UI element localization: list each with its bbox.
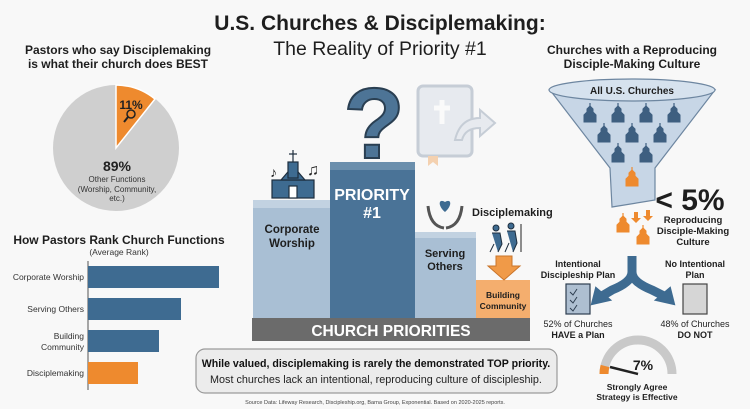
title xyxy=(214,12,546,60)
block: priority 1: PRIORITY xyxy=(334,187,410,204)
plan: no plan: DO NOT xyxy=(678,330,713,340)
plan: intentional: HAVE a Plan xyxy=(551,330,605,340)
funnel shape: All U.S. Churches xyxy=(590,86,674,97)
icon: church with notes: ♫ xyxy=(307,162,319,179)
gauge: 7 percent: Strategy is Effective xyxy=(596,392,678,402)
block: building community: Community xyxy=(480,301,527,311)
panel: bar chart rank: (Average Rank) xyxy=(89,247,149,257)
panel: funnel: Disciple-Making Culture xyxy=(564,57,701,71)
panel: podium xyxy=(252,68,553,341)
plan: intentional: Intentional xyxy=(555,259,601,269)
panel: funnel xyxy=(541,43,730,402)
arrow: split xyxy=(592,256,674,304)
pie chart: Other Functions xyxy=(89,175,145,184)
title: U.S. Churches & Disciplemaking: xyxy=(214,12,546,35)
plan: intentional xyxy=(541,259,615,340)
stat: less than 5 percent: Reproducing xyxy=(664,215,722,226)
gauge: 7 percent: 7% xyxy=(633,357,654,373)
pie chart: etc.) xyxy=(109,194,125,203)
callout: summary: Most churches lack an intentional, reproducing culture of discipleship. xyxy=(210,374,542,386)
title: The Reality of Priority #1 xyxy=(273,38,487,60)
panel: bar chart rank: Building xyxy=(54,331,84,341)
icon: church with notes xyxy=(270,150,319,198)
plan: no plan: No Intentional xyxy=(665,259,725,269)
heading: pastors say: is what their church does BEST xyxy=(28,57,209,71)
heading: pastors say: Pastors who say Disciplemaking xyxy=(25,43,211,57)
panel: bar chart rank: Serving Others xyxy=(27,304,84,314)
plan: intentional: Discipleship Plan xyxy=(541,270,615,280)
panel: pie chart best xyxy=(25,43,211,211)
panel: bar chart rank: Community xyxy=(41,342,85,352)
pie chart xyxy=(53,85,179,211)
plan: no plan: 48% of Churches xyxy=(660,319,730,329)
heading: pastors say xyxy=(25,43,211,71)
block: building community xyxy=(476,280,530,318)
icon: church with notes: ♪ xyxy=(270,164,277,180)
block: corporate worship xyxy=(253,200,331,318)
callout: summary xyxy=(196,349,557,393)
block: priority 1 xyxy=(330,162,415,318)
stat: less than 5 percent xyxy=(655,184,729,248)
block: serving others: Others xyxy=(427,261,463,273)
icon: falling churches xyxy=(617,210,653,244)
panel: bar chart rank: How Pastors Rank Church Functions xyxy=(13,233,225,247)
arrow: down orange xyxy=(488,256,520,280)
block: serving others xyxy=(415,232,476,318)
pie chart: 89% xyxy=(103,158,132,174)
block: corporate worship: Corporate xyxy=(265,224,319,236)
panel: funnel: Churches with a Reproducing xyxy=(547,43,717,57)
pie chart: (Worship, Community, xyxy=(78,185,156,194)
icon: bible xyxy=(418,86,495,166)
plan: intentional: 52% of Churches xyxy=(543,319,613,329)
plan: no plan xyxy=(660,259,730,340)
panel: bar chart rank: Corporate Worship xyxy=(13,272,84,282)
base: church priorities xyxy=(252,318,530,341)
pie chart: 11% xyxy=(119,98,143,112)
panel: bar chart rank xyxy=(13,233,225,390)
base: church priorities: CHURCH PRIORITIES xyxy=(311,323,471,340)
gauge: 7 percent xyxy=(596,340,678,402)
block: building community: Building xyxy=(486,290,520,300)
icon: walkers xyxy=(490,223,521,252)
panel: bar chart rank: Disciplemaking xyxy=(27,368,84,378)
callout: summary: While valued, disciplemaking is rarely the demonstrated TOP priority. xyxy=(202,358,550,370)
block: priority 1: #1 xyxy=(363,205,381,222)
icon: hands heart xyxy=(428,201,462,228)
gauge: 7 percent: Strongly Agree xyxy=(607,382,668,392)
stat: less than 5 percent: Disciple-Making xyxy=(657,226,729,237)
icon: question mark: ? xyxy=(343,68,405,180)
funnel shape xyxy=(549,79,715,207)
block: corporate worship: Worship xyxy=(269,238,315,250)
source: Source Data: Lifeway Research, Discipleship.org, Barna Group, Exponential. Based on 2020-2025 reports. xyxy=(245,400,505,406)
stat: less than 5 percent: Culture xyxy=(676,237,710,248)
label: disciplemaking: Disciplemaking xyxy=(472,207,553,219)
block: serving others: Serving xyxy=(425,248,465,260)
stat: less than 5 percent: < 5% xyxy=(655,184,725,217)
plan: no plan: Plan xyxy=(685,270,705,280)
